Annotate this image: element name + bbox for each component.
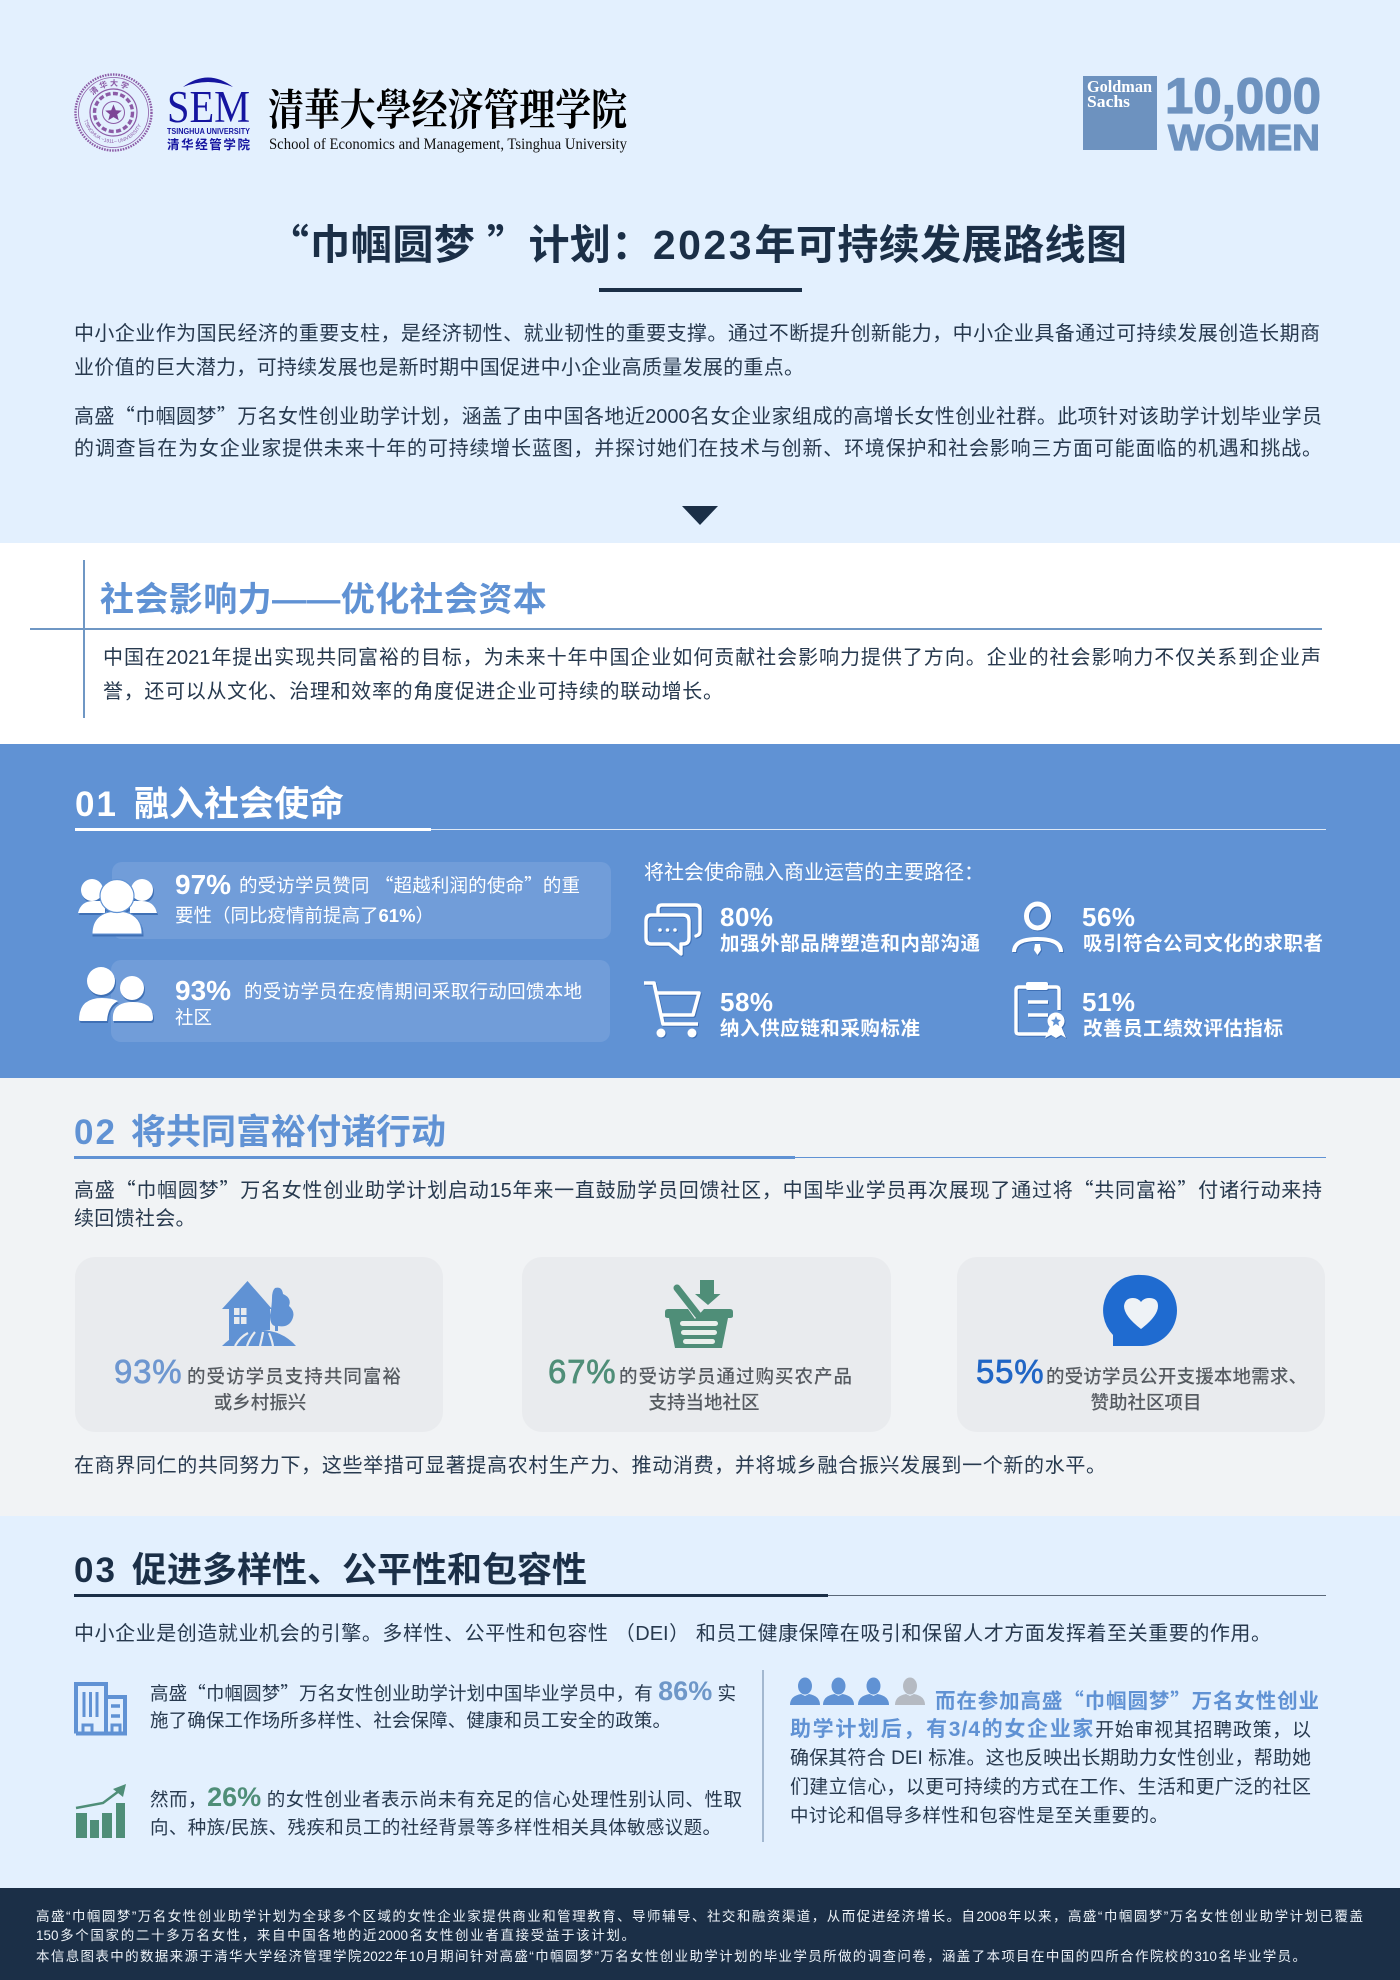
- panel: 01 social mission: [0, 744, 1400, 1078]
- text: 67 percent description: 的受访学员通过购买农产品: [619, 1366, 852, 1387]
- text: 67 percent figure: 67%: [548, 1353, 616, 1390]
- text: callout highlighted first line: 而在参加高盛“巾帼圆梦”万名女性创业: [935, 1684, 1319, 1714]
- text block: common prosperity description: 高盛“巾帼圆梦”万名女性创业助学计划启动15年来一直鼓励学员回馈社区，中国毕业学员再次展现了通过将“共同富裕”付诸行动来持: [74, 1174, 1322, 1203]
- icon: chat bubbles: [644, 903, 703, 957]
- text block: introduction: 中小企业作为国民经济的重要支柱，是经济韧性、就业韧性的重要支撑。通过不断提升创新能力，中小企业具备通过可持续发展创造长期商: [74, 323, 1320, 345]
- icon: SEM wordmark: TSINGHUA UNIVERSITY: [167, 127, 251, 136]
- text: 26 percent confidence: 向、种族/民族、残疾和员工的社经背景等多样性相关具体敏感议题。: [150, 1817, 721, 1838]
- text: 56 percent: 56%: [1082, 902, 1136, 932]
- text: 55 percent description: 的受访学员公开支援本地需求、: [1046, 1366, 1307, 1387]
- text: 93 percent description: 的受访学员在疫情期间采取行动回馈本地: [244, 981, 582, 1002]
- item: 51 percent: [1014, 982, 1283, 1040]
- item: 56 percent: [1012, 902, 1323, 956]
- text: 51 percent: 51%: [1082, 987, 1136, 1017]
- item: 80 percent: [644, 902, 980, 957]
- icon: Tsinghua university seal: TSINGHUA ~1911~ UNIVERSITY: [84, 119, 141, 143]
- card: 67 percent support: [522, 1257, 891, 1432]
- icon: basket with arrow: [665, 1280, 733, 1348]
- card: 93 percent support: [75, 1257, 443, 1432]
- footer: program note and data source: 本信息图表中的数据来源于清华大学经济管理学院2022年10月期间针对高盛“巾帼圆梦”万名女性创业助学计划的毕业学员所做的调查问卷，涵盖了本项目在中国的四所合作院校的310名毕业学员。: [36, 1949, 1306, 1964]
- text: callout remaining lines: [790, 1748, 1311, 1826]
- text: 97 percent second line: 要性（同比疫情前提高了61%）: [175, 905, 434, 926]
- icon: clipboard with medal: [1014, 982, 1067, 1039]
- text: callout remaining lines: 中讨论和倡导多样性和包容性是至关重要的。: [790, 1805, 1168, 1826]
- text block: introduction: 高盛“巾帼圆梦”万名女性创业助学计划，涵盖了由中国各地近2000名女企业家组成的高增长女性创业社群。此项针对该助学计划毕业学员: [74, 400, 1322, 429]
- panel: social impact intro: [0, 543, 1400, 744]
- footer: program note and data source: [0, 1888, 1400, 1980]
- text block: common prosperity description: [74, 1174, 1322, 1230]
- stat: 97 percent: [78, 862, 611, 939]
- arrow: down triangle: [682, 506, 718, 525]
- footer: program note and data source: 高盛“巾帼圆梦”万名女性创业助学计划为全球多个区域的女性企业家提供商业和管理教育、导师辅导、社交和融资渠道，从而促进经济增长。自2008年以来，高盛“巾帼圆梦”万名女性创业助学计划已覆盖: [36, 1909, 1363, 1924]
- text block: social impact description: [103, 646, 1321, 703]
- title: “巾帼圆梦 ”计划：2023年可持续发展路线图: [268, 211, 1127, 271]
- text: 86 percent policies: [150, 1676, 736, 1731]
- text: 93 percent second line: 社区: [175, 1007, 212, 1028]
- heading: 03 DEI: 03: [74, 1551, 117, 1590]
- text block: social impact description: 中国在2021年提出实现共同富裕的目标，为未来十年中国企业如何贡献社会影响力提供了方向。企业的社会影响力不仅关系到企业声: [103, 647, 1321, 669]
- logo: Tsinghua SEM: [74, 73, 627, 153]
- logo: Goldman Sachs 10,000 Women: [1083, 68, 1321, 158]
- text: 80 percent: 80%: [720, 902, 774, 932]
- icon: growth chart: [76, 1784, 126, 1838]
- heading: 01 social mission: 融入社会使命: [134, 785, 344, 824]
- logo: Goldman Sachs 10,000 Women: 10,000: [1165, 68, 1321, 124]
- text: closing statement: 在商界同仁的共同努力下，这些举措可显著提高农村生产力、推动消费，并将城乡融合振兴发展到一个新的水平。: [74, 1455, 1106, 1477]
- text: DEI description: 中小企业是创造就业机会的引擎。多样性、公平性和包容性 （DEI） 和员工健康保障在吸引和保留人才方面发挥着至关重要的作用。: [74, 1623, 1271, 1645]
- text block: common prosperity description: 续回馈社会。: [74, 1208, 196, 1230]
- text: external and internal communications: 加强外部品牌塑造和内部沟通: [720, 933, 980, 955]
- card: 55 percent support: [957, 1257, 1325, 1432]
- text: callout remaining lines: 确保其符合 DEI 标准。这也反映出长期助力女性创业，帮助她: [790, 1748, 1311, 1769]
- heading: main pathways: 将社会使命融入商业运营的主要路径：: [644, 862, 984, 884]
- text block: introduction: 的调查旨在为女企业家提供未来十年的可持续增长蓝图，并探讨她们在技术与创新、环境保护和社会影响三方面可能面临的机遇和挑战。: [74, 438, 1322, 460]
- text: 86 percent policies: 施了确保工作场所多样性、社会保障、健康和员工安全的政策。: [150, 1710, 671, 1731]
- text: 93 percent second line: 或乡村振兴: [214, 1392, 306, 1413]
- icon: three people: [78, 879, 158, 936]
- icon: Tsinghua university seal: 清 华 大 学: [89, 79, 129, 96]
- stat: 93 percent: [79, 960, 610, 1042]
- text: 55 percent figure: 55%: [976, 1353, 1044, 1390]
- text block: introduction: [74, 322, 1322, 460]
- text: 97 percent description: 的受访学员赞同 “超越利润的使命”的重: [239, 872, 580, 898]
- heading: 02 common prosperity: 将共同富裕付诸行动: [131, 1113, 446, 1152]
- icon: rural house: [222, 1281, 296, 1346]
- icon: shopping cart: [644, 981, 702, 1038]
- text: 67 percent second line: 支持当地社区: [648, 1392, 760, 1413]
- text: 93 percent figure: 93%: [175, 975, 231, 1006]
- item: 58 percent: [644, 981, 920, 1040]
- text: performance metrics: 改善员工绩效评估指标: [1083, 1018, 1283, 1040]
- logo: Goldman Sachs 10,000 Women: Sachs: [1087, 92, 1130, 111]
- text block: introduction: 业价值的巨大潜力，可持续发展也是新时期中国促进中小企业高质量发展的重点。: [74, 357, 804, 379]
- icon: SEM wordmark: 清华经管学院: [167, 137, 250, 152]
- callout: three quarters: [790, 1678, 1319, 1826]
- text: supply chain standards: 纳入供应链和采购标准: [720, 1018, 920, 1040]
- icon: SEM wordmark: SEM: [167, 82, 250, 132]
- text: 26 percent confidence: 然而，26% 的女性创业者表示尚未有充足的信心处理性别认同、性取: [150, 1782, 742, 1812]
- heading: 02 common prosperity: 02: [74, 1113, 117, 1152]
- logo: Goldman Sachs 10,000 Women: WOMEN: [1168, 117, 1320, 158]
- text: 26 percent confidence: [150, 1782, 742, 1838]
- text: 58 percent: 58%: [720, 987, 774, 1017]
- text: 97 percent figure: 97%: [175, 869, 231, 900]
- text: 93 percent description: 的受访学员支持共同富裕: [187, 1366, 401, 1387]
- icon: four people, three highlighted: [790, 1678, 925, 1705]
- panel: 03 diversity, equity and inclusion: [0, 1516, 1400, 1888]
- icon: person with tie: [1012, 902, 1064, 956]
- heading: 03 DEI: 促进多样性、公平性和包容性: [132, 1551, 587, 1590]
- text: school name in English: School of Economics and Management, Tsinghua University: [269, 136, 627, 153]
- heading: 01 social mission: 01: [75, 785, 118, 824]
- icon: office buildings: [74, 1682, 127, 1736]
- text: 55 percent second line: 赞助社区项目: [1090, 1392, 1202, 1413]
- logo: Goldman Sachs 10,000 Women: Goldman: [1087, 77, 1153, 96]
- text: 93 percent figure: 93%: [114, 1353, 182, 1390]
- icon: speech bubble with heart: [1103, 1274, 1177, 1346]
- text: callout remaining lines: 们建立信心，以更可持续的方式在工作、生活和更广泛的社区: [790, 1777, 1311, 1798]
- text: attract job seekers: 吸引符合公司文化的求职者: [1083, 933, 1323, 955]
- panel: header and introduction: [0, 0, 1400, 543]
- text: callout second line: 助学计划后，有3/4的女企业家开始审视其招聘政策，以: [790, 1718, 1311, 1741]
- panel: main pathways: [644, 862, 1323, 1040]
- panel: 02 common prosperity: [0, 1078, 1400, 1516]
- icon: SEM wordmark: [167, 78, 251, 152]
- footer: program note and data source: 150多个国家的二十多万名女性，来自中国各地的近2000名女性创业者直接受益于该计划。: [36, 1928, 635, 1943]
- text: school name in Chinese: 清華大學经济管理学院: [268, 87, 627, 135]
- text block: social impact description: 誉，还可以从文化、治理和效率的角度促进企业可持续的联动增长。: [103, 681, 723, 703]
- icon: two people: [79, 967, 154, 1023]
- text: 86 percent policies: 高盛“巾帼圆梦”万名女性创业助学计划中国毕业学员中，有 86% 实: [150, 1676, 736, 1706]
- icon: Tsinghua university seal: [74, 73, 153, 152]
- heading: social impact: 社会影响力——优化社会资本: [100, 581, 547, 619]
